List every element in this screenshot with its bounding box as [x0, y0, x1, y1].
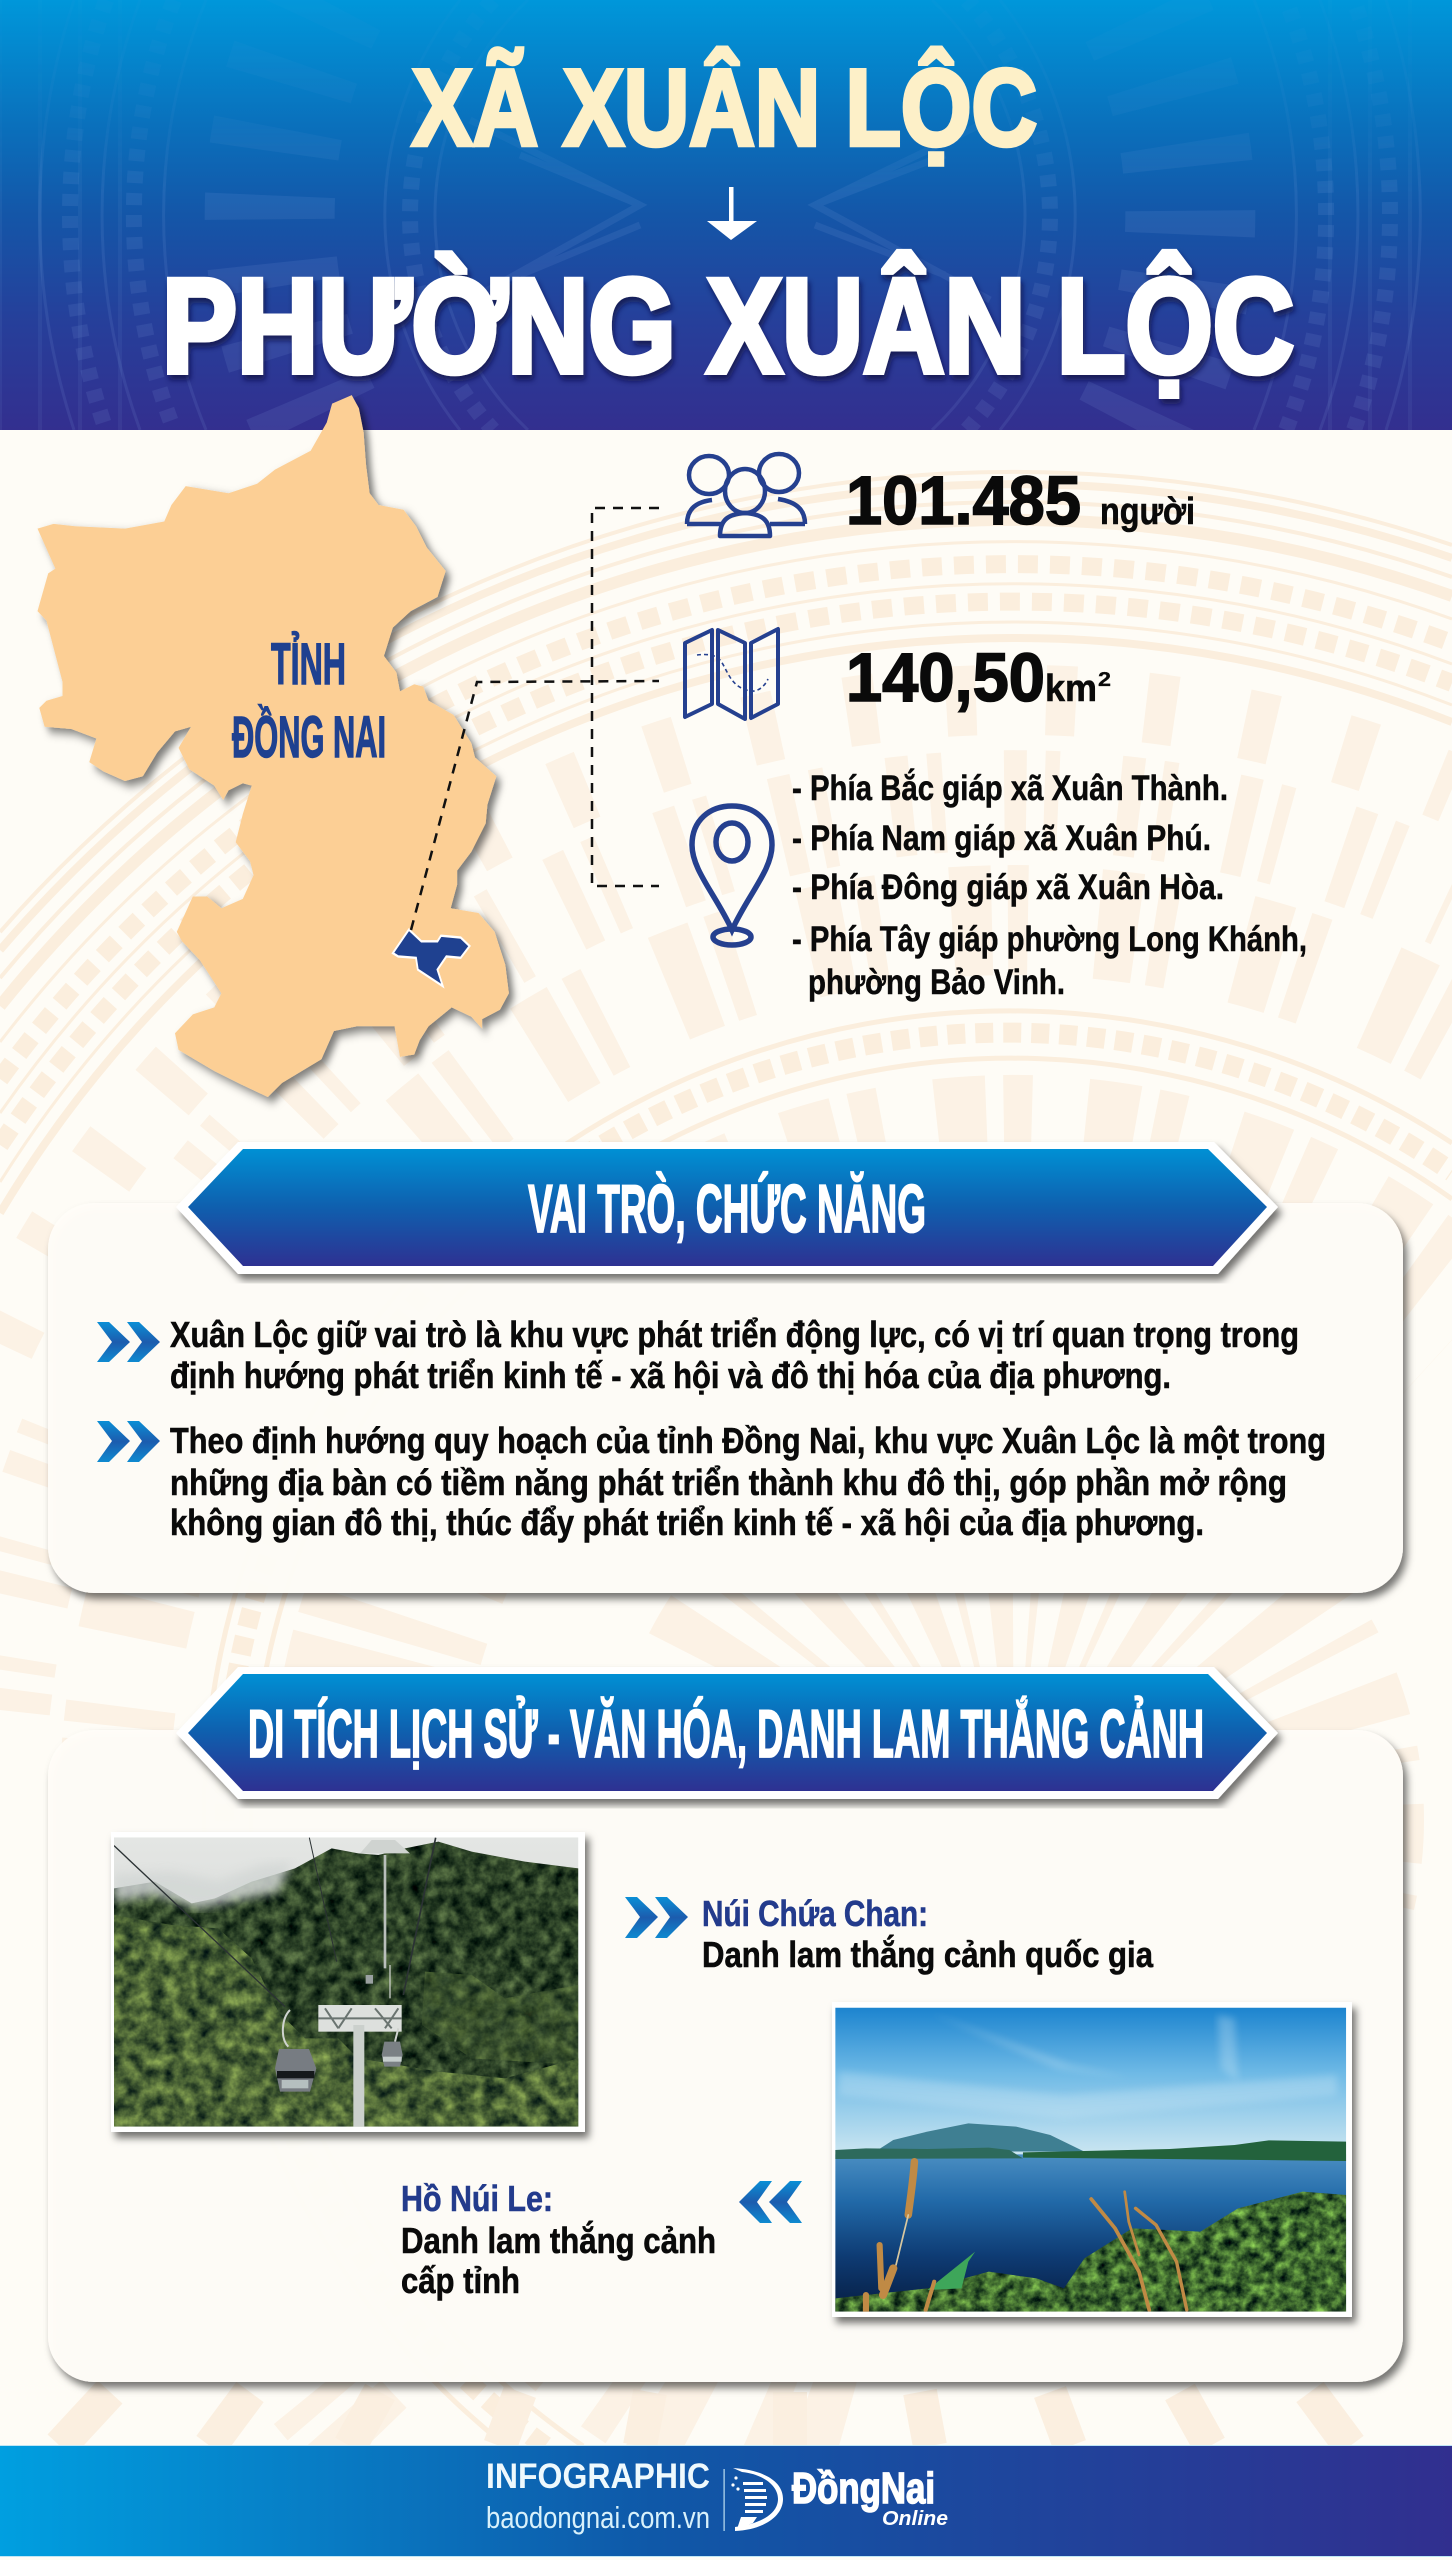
header band: [0, 0, 1452, 430]
icon: location pin: [692, 806, 772, 945]
icon: folded map: [685, 629, 778, 719]
body text: không gian đô thị, thúc đẩy phát triển kinh tế - xã hội của địa phương.: [170, 1502, 1204, 1543]
bullet chevrons: [97, 1322, 160, 1462]
panel: di tích, danh lam: [48, 1730, 1403, 2382]
map label: ĐỒNG NAI: [232, 705, 386, 770]
logo wordmark: [792, 2464, 948, 2530]
arrow down: [707, 187, 757, 240]
photo: Núi Chứa Chan cable car: [111, 1832, 585, 2132]
banner: vai trò, chức năng: [176, 1142, 1278, 1274]
borders list: - Phía Đông giáp xã Xuân Hòa.: [792, 868, 1224, 907]
chevrons left: [739, 2181, 802, 2223]
borders list: - Phía Bắc giáp xã Xuân Thành.: [792, 768, 1228, 808]
map: Xuân Lộc highlighted area: [393, 930, 470, 986]
population figure: người: [1100, 491, 1195, 533]
footer band: [0, 2445, 1452, 2557]
title: XÃ XUÂN LỘC: XÃ XUÂN LỘC: [412, 47, 1037, 169]
body text: những địa bàn có tiềm năng phát triển thành khu đô thị, góp phần mở rộng: [170, 1462, 1287, 1503]
caption: Hồ Núi Le: [401, 2178, 802, 2301]
area figure: 140,50: [846, 639, 1045, 716]
area figure: 2: [1098, 669, 1111, 691]
body text: định hướng phát triển kinh tế - xã hội và đô thị hóa của địa phương.: [170, 1355, 1171, 1396]
logo wordmark: Online: [882, 2508, 948, 2530]
banner: vai trò, chức năng: VAI TRÒ, CHỨC NĂNG: [528, 1171, 926, 1247]
map label: TỈNH: [271, 632, 346, 697]
caption: Núi Chứa Chan: Danh lam thắng cảnh quốc gia: [702, 1933, 1154, 1975]
background drum pattern: [0, 472, 1452, 2446]
dashed connector lines: [411, 508, 659, 930]
borders list: phường Bảo Vinh.: [808, 963, 1065, 1002]
caption: Hồ Núi Le: Danh lam thắng cảnh: [401, 2219, 716, 2261]
photo: Hồ Núi Le: [832, 2002, 1352, 2317]
logo wordmark: ĐồngNai: [792, 2464, 935, 2513]
area figure: km: [1045, 668, 1097, 710]
population figure: 101.485: [846, 462, 1081, 539]
logo icon: [731, 2468, 783, 2531]
icon: people: [687, 454, 805, 536]
panel: vai trò, chức năng: [48, 1203, 1403, 1593]
caption: Hồ Núi Le: Hồ Núi Le:: [401, 2178, 553, 2219]
footer divider: [724, 2469, 725, 2531]
map: Đồng Nai province: [37, 395, 509, 1097]
footer url: baodongnai.com.vn: [486, 2500, 710, 2535]
caption: Núi Chứa Chan: Núi Chứa Chan:: [702, 1893, 928, 1934]
borders list: [792, 768, 1307, 1002]
banner: di tích lịch sử: [176, 1667, 1278, 1799]
borders list: - Phía Tây giáp phường Long Khánh,: [792, 920, 1307, 959]
footer label: INFOGRAPHIC: [486, 2457, 710, 2496]
caption: Núi Chứa Chan: [625, 1893, 1154, 1975]
chevrons right: [625, 1897, 688, 1938]
borders list: - Phía Nam giáp xã Xuân Phú.: [792, 819, 1211, 858]
map label: [232, 632, 386, 770]
caption: Hồ Núi Le: cấp tỉnh: [401, 2260, 520, 2301]
body text: [170, 1314, 1326, 1543]
